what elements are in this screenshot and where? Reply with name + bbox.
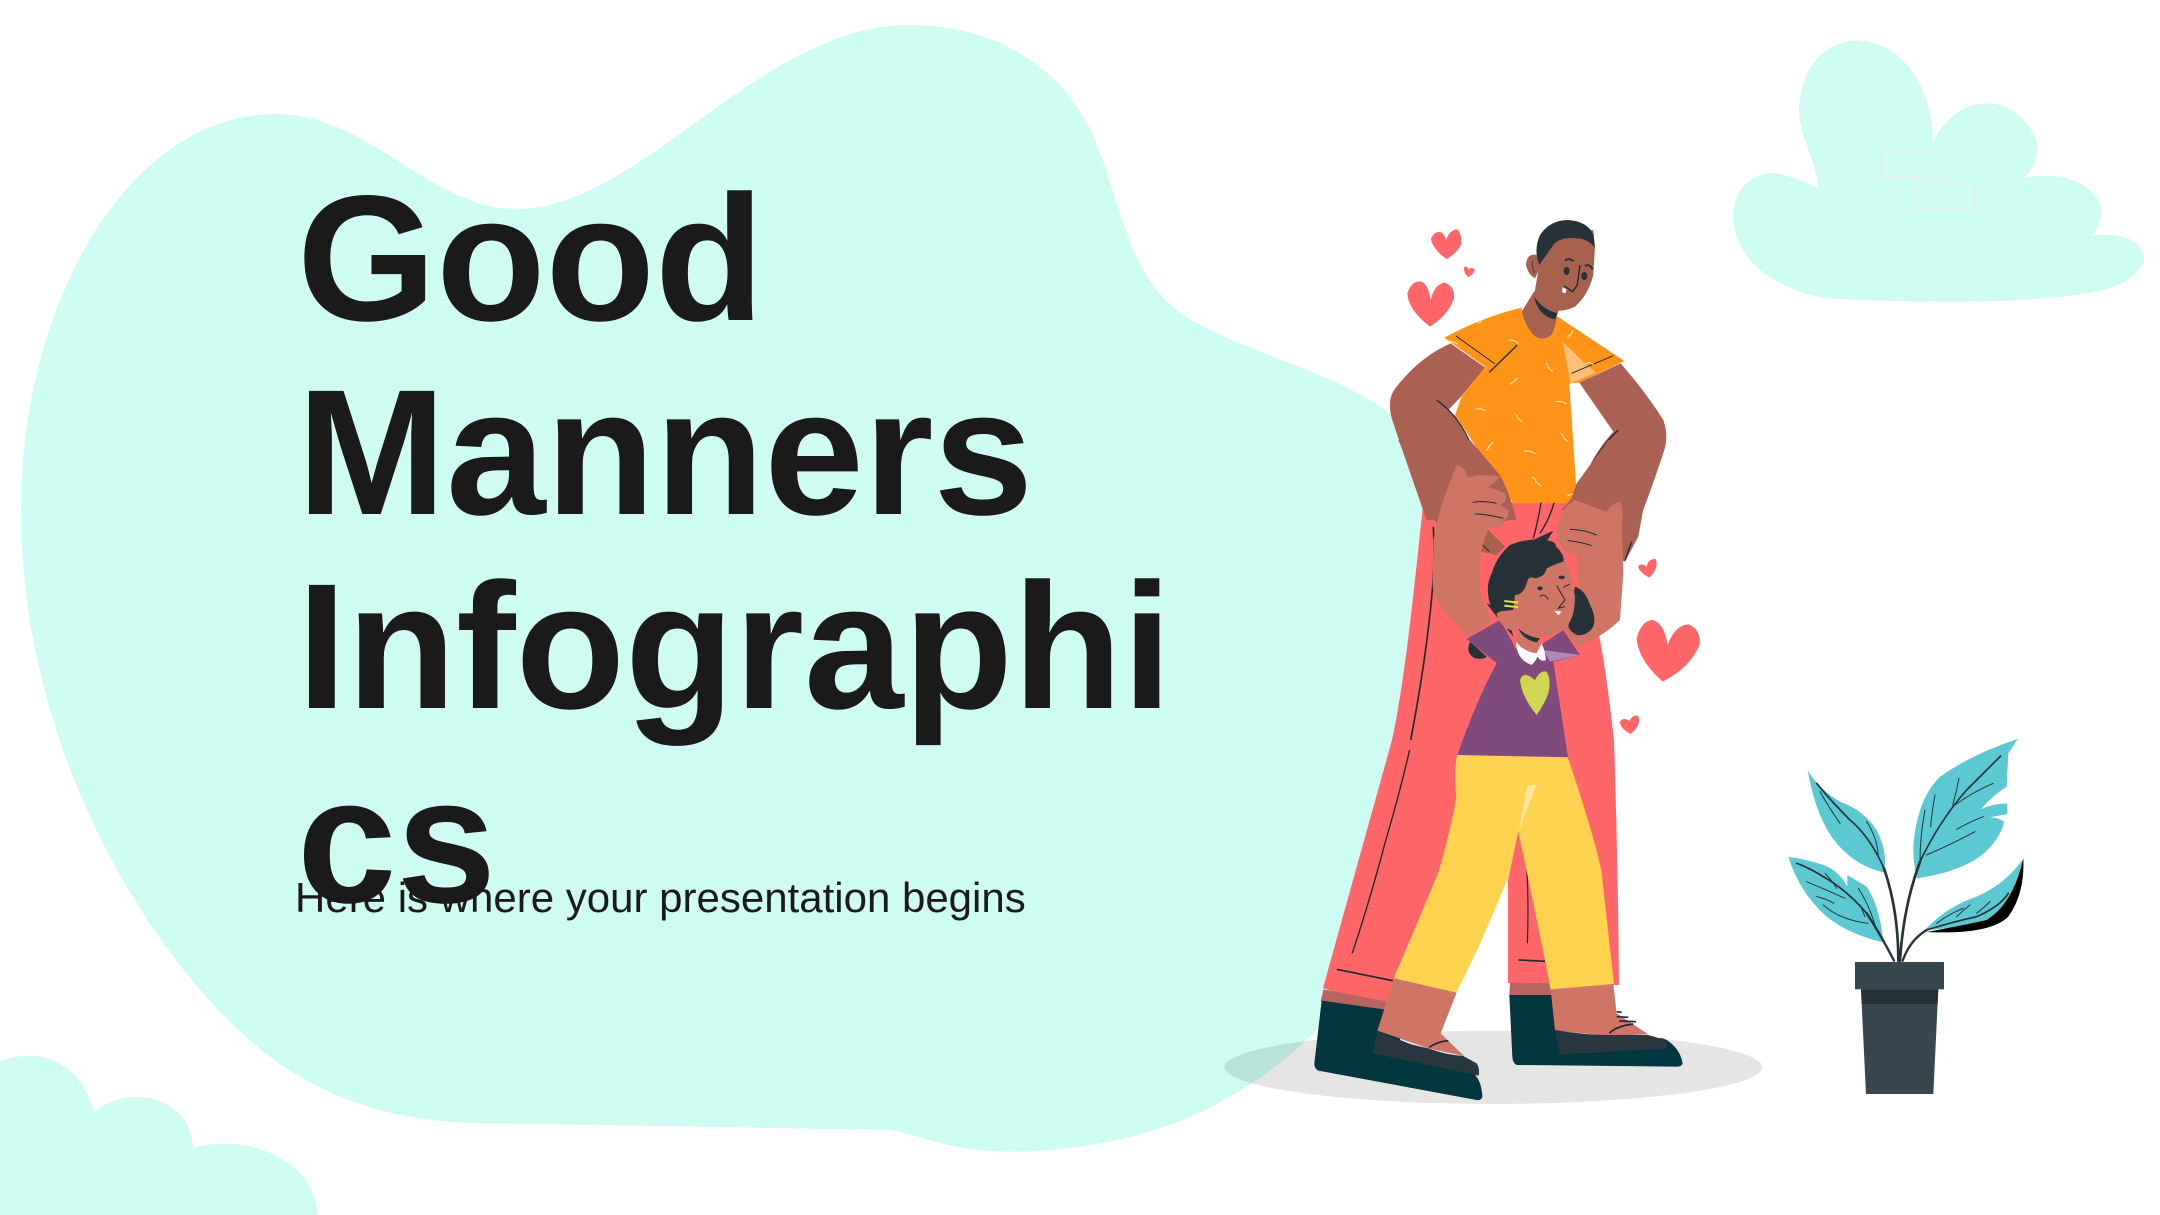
man's left arm	[1390, 343, 1517, 520]
girl's shoes	[1373, 1031, 1479, 1076]
pot	[1861, 989, 1938, 1094]
man's forearms, girl and hearts right	[1398, 440, 1700, 757]
girl's back hair	[1568, 587, 1594, 635]
girl's trousers and feet	[1394, 755, 1614, 993]
background blob	[21, 25, 1435, 1152]
girl's right arm and hand	[1557, 500, 1623, 647]
man's upper body	[1390, 220, 1666, 543]
girl's dress	[1457, 620, 1580, 757]
girl's head	[1513, 553, 1575, 637]
leaves	[1788, 739, 2023, 942]
cloud top right	[1733, 40, 2144, 302]
title: Infographi	[297, 546, 1172, 746]
girl's neck	[1515, 628, 1540, 653]
hearts right	[1638, 559, 1657, 578]
hearts left	[1407, 281, 1454, 327]
stems and veins	[1797, 756, 2008, 961]
yellow heart on dress	[1520, 671, 1550, 715]
man's trousers	[1323, 500, 1619, 1015]
neck	[1522, 292, 1560, 339]
head	[1534, 230, 1595, 311]
girl's left arm and hand	[1433, 465, 1508, 637]
forearms	[1398, 440, 1516, 523]
ground shadow	[1225, 1031, 1762, 1104]
title: Good	[297, 158, 764, 358]
shirt squiggles	[1448, 321, 1593, 496]
shirt	[1448, 395, 1463, 417]
title: cs	[297, 740, 496, 940]
potted plant	[1788, 739, 2023, 1094]
man's feet and lower legs	[1314, 983, 1683, 1100]
man's right arm	[1562, 363, 1666, 543]
illustration: father and daughter	[1314, 220, 1700, 1100]
title: Manners	[297, 352, 1033, 552]
collar	[1516, 642, 1546, 665]
belt straps	[1533, 503, 1554, 538]
small skin patch	[1481, 528, 1505, 555]
cloud bottom left	[0, 1056, 317, 1215]
subtitle: Here is where your presentation begins	[295, 874, 1026, 921]
trouser seams	[1337, 750, 1546, 981]
